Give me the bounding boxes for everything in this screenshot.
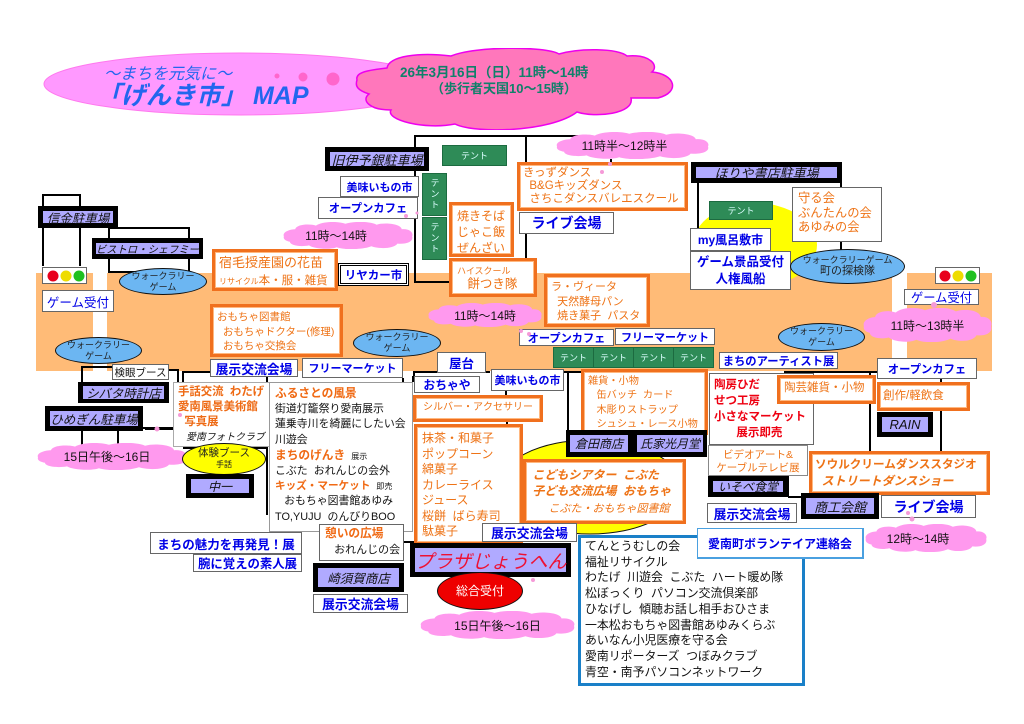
cloud: 11時～14時 center xyxy=(428,303,542,327)
tent vertical: テント xyxy=(430,178,440,211)
panel: 守る会: 守る会 ぶんたんの会 あゆみの会 xyxy=(798,191,872,234)
label: オープンカフェ right xyxy=(877,358,977,379)
shop label: シバタ時計店: シバタ時計店 xyxy=(86,387,161,401)
label: 美味いもの市 center xyxy=(491,369,564,391)
panel: ふるさとの風景: ふるさとの風景 街道灯籠祭り愛南展示 蓮乗寺川を綺麗にしたい会 川遊会 まちのげんき 展示 こぶた おれんじの会外 キッズ・マーケット 即売 おもちゃ図書館あゆみ TO,YUJU のんびりBOO xyxy=(275,387,406,523)
label: まちの魅力: まちの魅力を再発見！展 xyxy=(157,538,295,552)
label: 愛南町ボランテイア連絡会: 愛南町ボランテイア連絡会 xyxy=(708,536,852,550)
cloud: 11時半 xyxy=(556,132,708,159)
tent 4 xyxy=(673,347,714,368)
panel: ビデオアート: ビデオアート& ケーブルテレビ展 xyxy=(716,449,800,474)
label: 美味いもの市 xyxy=(340,176,419,197)
tent 1: テント xyxy=(560,353,587,363)
label: フリーマーケット xyxy=(302,358,403,378)
label: まちのアーティスト展 xyxy=(719,352,838,369)
shop label: シバタ時計店 xyxy=(78,382,169,403)
tent row xyxy=(553,347,714,368)
panel: 宿毛授産園: 宿毛授産園の花苗 リサイクル本・服・雑貨 xyxy=(219,255,328,287)
parking label: 信金: 信金駐車場 xyxy=(47,212,109,226)
tent vertical: テント xyxy=(430,222,440,255)
tent 3 xyxy=(633,347,674,368)
parking label: ひめぎん: ひめぎん駐車場 xyxy=(50,413,138,427)
ellipse: 体験ブース: 体験ブース xyxy=(198,447,250,459)
label: オープンカフェ: オープンカフェ xyxy=(329,203,407,215)
label: オープンカフェ center xyxy=(519,329,614,346)
ellipse: 総合受付: 総合受付 xyxy=(456,584,504,598)
label: 展示交流会場 lower: 展示交流会場 xyxy=(322,597,399,612)
label: オープンカフェ center: オープンカフェ xyxy=(528,332,605,344)
traffic light left xyxy=(42,267,87,284)
date text: 26年3月16日（日）11時～14時 xyxy=(400,65,588,80)
panel: 陶芸雑貨 xyxy=(777,375,876,404)
panel: 陶芸雑貨: 陶芸雑貨・小物 xyxy=(784,382,864,394)
school label: 中一 xyxy=(186,474,254,498)
ellipse: walk rally 1 xyxy=(119,268,207,295)
ellipse: walk rally 3 xyxy=(55,337,142,364)
label: まちのアーティスト展: まちのアーティスト展 xyxy=(723,356,834,368)
label: 展示交流会場 right: 展示交流会場 xyxy=(714,506,790,522)
ellipse: walk rally 1: ウォークラリー ゲーム xyxy=(131,270,194,292)
shop label: 崎須賀商店 xyxy=(313,563,404,592)
tent: テント xyxy=(727,206,754,216)
ellipse: 町の探検隊: 町の探検隊 xyxy=(820,264,875,276)
ellipse: 総合受付 xyxy=(437,572,523,610)
label: フリーマーケット center xyxy=(615,328,715,345)
school label: 中一: 中一 xyxy=(208,480,232,494)
label: ゲーム景品受付: ゲーム景品受付 人権風船 xyxy=(697,255,784,286)
tent 2 xyxy=(593,347,634,368)
parking label: 旧伊予銀 xyxy=(325,147,429,171)
title ellipse xyxy=(44,52,388,116)
shop labels xyxy=(566,430,707,457)
panel: ハイスクール: ハイスクール 餅つき隊 xyxy=(457,266,517,291)
ellipse: 町の探検隊 xyxy=(790,249,905,284)
parking label: ビストロ xyxy=(92,238,203,259)
cloud: 15日午後 left xyxy=(38,443,185,470)
ellipse: 体験ブース: 手話 xyxy=(216,460,232,469)
shop: 氏家光月堂: 氏家光月堂 xyxy=(640,437,700,451)
main title: 「げんき市」 MAP xyxy=(96,82,309,110)
cloud: 11時～13時半 xyxy=(864,308,992,342)
parking label: ほりや書店 xyxy=(691,162,842,183)
cloud: 11時～13時半: 11時～13時半 xyxy=(891,318,964,332)
label: おちゃや: おちゃや xyxy=(423,378,471,392)
parking label: 旧伊予銀: 旧伊予銀駐車場 xyxy=(331,152,422,168)
label: 腕に覚えの素人展: 腕に覚えの素人展 xyxy=(198,557,297,571)
panel: 抹茶: 抹茶・和菓子 ポップコーン 綿菓子 カレーライス ジュース 桜餅 ばら寿司 駄菓子 xyxy=(422,431,501,538)
date cloud xyxy=(356,48,674,130)
tent xyxy=(442,145,507,166)
ellipse: 町の探検隊: ウォークラリーゲーム xyxy=(803,254,892,264)
label: ゲーム受付 right: ゲーム受付 xyxy=(911,291,972,305)
panel: おもちゃ図書館 xyxy=(210,304,343,357)
tent 4: テント xyxy=(680,353,707,363)
panel: 抹茶 xyxy=(414,424,523,545)
ellipse: walk rally 2: ウォークラリー ゲーム xyxy=(365,332,428,353)
shop label: 商工会館: 商工会館 xyxy=(814,500,866,514)
label: 展示交流会場 right xyxy=(707,503,797,523)
label: ゲーム受付 left xyxy=(42,290,114,312)
shop label: 崎須賀商店: 崎須賀商店 xyxy=(327,572,390,586)
panel: きっずダンス: きっずダンス B&Gキッズダンス さちこダンスバレエスクール xyxy=(523,167,679,205)
label: 検眼ブース xyxy=(112,364,169,380)
panel: 焼きそば: 焼きそば じゃこ飯 ぜんざい xyxy=(457,209,505,255)
parking label: ひめぎん xyxy=(45,406,143,431)
parking label: 信金 xyxy=(38,206,118,228)
label: 愛南町ボランテイア連絡会 xyxy=(697,528,864,559)
panel: ラ・ヴィータ: ラ・ヴィータ 天然酵母パン 焼き菓子 パスタ xyxy=(551,281,640,322)
cloud: 11時～14時: 11時～14時 xyxy=(305,229,367,243)
cloud: 15日午後 left: 15日午後～16日 xyxy=(64,450,150,464)
label: 屋台 xyxy=(437,352,486,373)
tent vertical xyxy=(422,173,447,216)
panel: ビデオアート xyxy=(708,445,808,476)
label: 展示交流会場 center: 展示交流会場 xyxy=(491,526,568,541)
cloud: 15日午後 center xyxy=(420,611,574,639)
pedestrian hours: （歩行者天国10～15時） xyxy=(431,81,577,96)
cloud: 12時～14時: 12時～14時 xyxy=(887,532,949,546)
main label: プラザじょうへん: プラザじょうへん xyxy=(414,552,567,572)
label: my風呂敷市 xyxy=(690,228,771,251)
label: my風呂敷市: my風呂敷市 xyxy=(698,233,763,247)
tent: テント xyxy=(461,151,488,161)
panel: 創作/軽飲食 xyxy=(877,382,970,411)
panel: こどもシアター: こどもシアター こぶた 子ども交流広場 おもちゃ こぶた・おもちゃ図書館 xyxy=(529,468,671,515)
tent xyxy=(709,201,773,220)
panel: 焼きそば xyxy=(449,202,514,257)
label: フリーマーケット: フリーマーケット xyxy=(308,363,396,375)
label: オープンカフェ xyxy=(318,197,418,219)
panel: 創作/軽飲食: 創作/軽飲食 xyxy=(883,390,944,402)
panel: ソウルクリーム: ソウルクリームダンススタジオ ストリートダンスショー xyxy=(815,458,977,488)
panel: 憩いの広場 xyxy=(319,524,404,561)
label: おちゃや xyxy=(414,376,480,393)
tent vertical xyxy=(422,217,447,260)
panel: 雑貨: 雑貨・小物 缶バッチ カード 木彫りストラップ シュシュ・レース小物 xyxy=(588,376,698,430)
ellipse: walk rally 4: ウォークラリー ゲーム xyxy=(790,326,853,347)
tent 1 xyxy=(553,347,594,368)
label: 美味いもの市: 美味いもの市 xyxy=(346,182,412,194)
cloud: 11時～14時 center: 11時～14時 xyxy=(454,308,516,322)
label: まちの魅力 xyxy=(150,532,302,554)
label: ゲーム受付 left: ゲーム受付 xyxy=(47,296,109,310)
shop: 倉田商店 xyxy=(570,435,628,452)
panel: ハイスクール xyxy=(449,258,537,297)
label: ライブ会場: ライブ会場 xyxy=(532,215,602,231)
ellipse: 体験ブース xyxy=(182,443,266,475)
label: 展示交流会場 center xyxy=(482,523,577,542)
parking label: ビストロ: ビストロ・シェフミー xyxy=(96,245,199,256)
parking label: ほりや書店: ほりや書店駐車場 xyxy=(714,166,818,181)
label: 展示交流会場 lower xyxy=(313,594,408,613)
label: リヤカー市: リヤカー市 xyxy=(345,270,402,282)
main label: プラザじょうへん xyxy=(410,543,571,577)
cloud: 15日午後 center: 15日午後～16日 xyxy=(454,618,541,632)
panel: ソウルクリーム xyxy=(809,451,990,495)
shop label: RAIN: RAIN xyxy=(889,417,921,432)
panel: ラ・ヴィータ xyxy=(544,274,650,327)
panel: 宿毛授産園 xyxy=(212,249,338,291)
cloud: 12時～14時 xyxy=(866,524,986,552)
traffic light right xyxy=(935,267,980,284)
label: 検眼ブース: 検眼ブース xyxy=(114,366,166,378)
label: ライブ会場 right: ライブ会場 xyxy=(894,498,964,514)
panel: こどもシアター xyxy=(523,459,686,524)
shop label: 商工会館 xyxy=(801,493,879,519)
ellipse: walk rally 3: ウォークラリー ゲーム xyxy=(67,340,130,360)
panel: シルバー xyxy=(413,395,543,422)
label: ゲーム景品受付 xyxy=(690,251,791,290)
panel: シルバー: シルバー・アクセサリー xyxy=(423,402,533,413)
panel: 守る会 xyxy=(792,187,882,242)
cloud: 11時半: 11時半～12時半 xyxy=(582,139,667,153)
label: オープンカフェ right: オープンカフェ xyxy=(888,364,966,376)
panel: おもちゃ図書館: おもちゃ図書館 おもちゃドクター(修理) おもちゃ交換会 xyxy=(217,311,334,352)
label: ライブ会場 xyxy=(519,212,614,234)
subtitle: ～まちを元気に～ xyxy=(104,66,232,83)
cloud: 11時～14時 xyxy=(284,222,412,249)
panel: volunteer list: てんとうむしの会 福祉リサイクル わたげ 川遊会 こぶた ハート暖め隊 松ぼっくり パソコン交流倶楽部 ひなげし 傾聴お話し相手おひさま 一本松おもちゃ図書館あゆみくらぶ あいなん小児医療を守る会 愛南リポーターズ つぼみクラブ 青空・南予パソコンネットワーク xyxy=(585,539,783,679)
label: ライブ会場 right xyxy=(881,495,976,518)
shop label: RAIN xyxy=(877,412,933,437)
ellipse: walk rally 2 xyxy=(353,329,441,357)
shop label: いそべ食堂: いそべ食堂 xyxy=(718,480,778,494)
ellipse: walk rally 4 xyxy=(778,323,865,351)
tent 2: テント xyxy=(600,353,627,363)
panel: 陶房ひだ: 陶房ひだ せつ工房 小さなマーケット 展示即売 xyxy=(714,379,806,439)
label: 展示交流会場: 展示交流会場 xyxy=(216,362,292,376)
panel: 手話交流: 手話交流 わたげ 愛南風景美術館 写真展 愛南フォトクラブ xyxy=(178,386,265,443)
title xyxy=(96,66,309,110)
label: フリーマーケット center: フリーマーケット xyxy=(621,332,709,344)
label: 屋台: 屋台 xyxy=(449,357,474,371)
shop label: いそべ食堂 xyxy=(708,476,788,497)
tent 3: テント xyxy=(640,353,667,363)
label: リヤカー市 xyxy=(338,263,409,286)
shop: 倉田商店: 倉田商店 xyxy=(575,437,623,451)
panel: 憩いの広場: 憩いの広場 おれんじの会 xyxy=(325,527,400,556)
label: 美味いもの市 center: 美味いもの市 xyxy=(494,375,560,387)
